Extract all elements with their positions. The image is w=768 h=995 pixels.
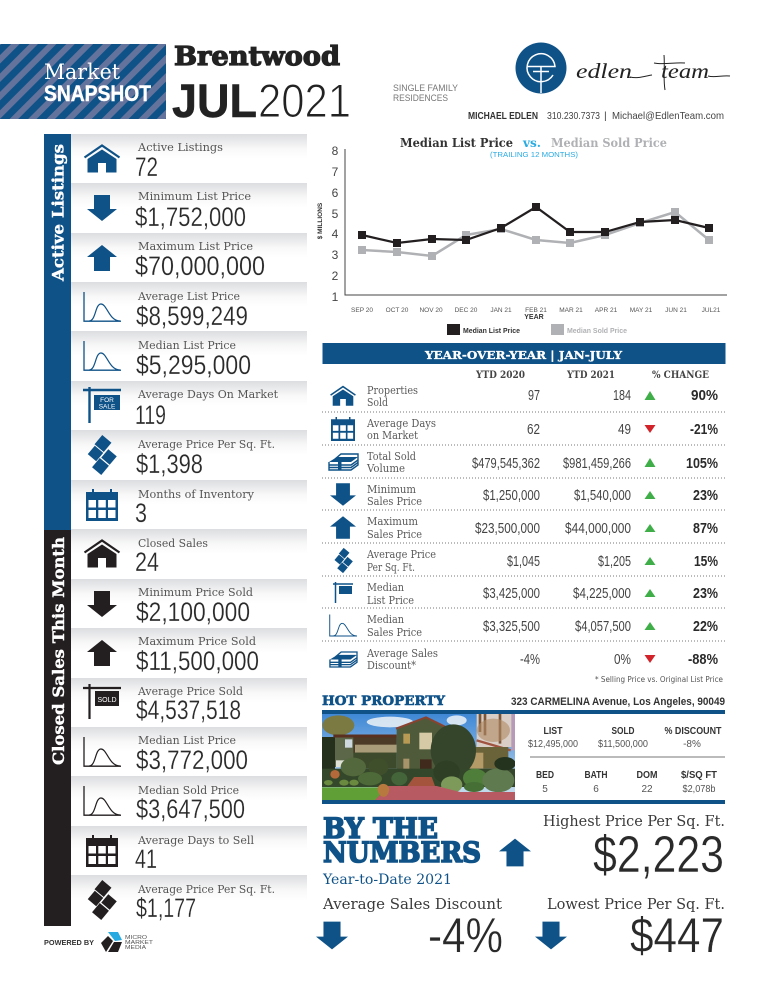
row: average price per sq ft: [71, 875, 307, 926]
logo: edlen team: [516, 42, 730, 94]
chart legend: [447, 324, 627, 335]
line chart: median list vs sold price: JUN 21: [665, 307, 687, 314]
banner: market snapshot: SNAPSHOT: [44, 81, 151, 106]
row: average days on market: 119: [135, 400, 166, 430]
stat: highest price per sq ft: [499, 812, 725, 884]
stat: average sales discount: [316, 895, 503, 963]
row: average price per sq ft: $1,205: [598, 554, 631, 570]
row: closed sales: 24: [135, 547, 159, 577]
chart legend: Median Sold Price: [567, 326, 627, 335]
property stats: % DISCOUNT: [664, 726, 722, 737]
row: average list price: [71, 282, 307, 331]
row: total sold volume: Volume: [366, 462, 405, 475]
line chart: median list vs sold price: MAR 21: [559, 307, 583, 314]
row: average price per sq ft: Per Sq. Ft.: [367, 561, 415, 574]
row: median sold price: Median Sold Price: [138, 784, 239, 797]
line chart: median list vs sold price: JUL21: [702, 307, 721, 314]
row: months of inventory: 3: [135, 498, 147, 528]
table header: year over year: YEAR-OVER-YEAR | JAN-JULY: [424, 348, 623, 362]
row: properties sold: Properties: [367, 384, 418, 397]
line chart: median list vs sold price: [317, 144, 727, 321]
table dividers: [322, 412, 726, 641]
row: median list price: $3,772,000: [136, 745, 248, 775]
line chart: median list vs sold price: DEC 20: [455, 307, 478, 314]
subheading: year to date: Year-to-Date 2021: [322, 872, 452, 888]
photo: house: [322, 714, 516, 800]
banner: market snapshot: Market: [44, 60, 121, 84]
row: average list price: $8,599,249: [136, 301, 248, 331]
powered by credit: MEDIA: [125, 945, 147, 951]
row: average price per sq ft: Average Price: [366, 548, 436, 561]
property stats: LIST: [544, 726, 562, 737]
row: median sales price: 22%: [693, 619, 718, 635]
property stats: BATH: [584, 770, 608, 781]
row: maximum list price: [71, 233, 307, 282]
row: average days on market: [331, 417, 718, 442]
powered by credit: [44, 932, 153, 952]
heading: by the numbers: NUMBERS: [323, 836, 481, 869]
row: properties sold: [331, 384, 718, 409]
row: average price sold: [71, 678, 307, 727]
row: average price per sq ft: 15%: [694, 554, 718, 570]
panel: active listings rows: [71, 134, 307, 529]
row: minimum price sold: Minimum Price Sold: [138, 586, 253, 599]
row: minimum list price: [71, 183, 307, 233]
line chart: median list vs sold price: APR 21: [595, 307, 618, 314]
row: average days on market: Average Days: [366, 417, 436, 430]
row: median list price: List Price: [367, 594, 414, 607]
row: maximum price sold: $11,500,000: [136, 646, 259, 676]
property stats: [528, 726, 725, 795]
line chart: median list vs sold price: 4: [332, 227, 339, 241]
property stats: 22: [641, 784, 653, 795]
sidebar: closed sales: [44, 530, 71, 926]
row: maximum list price: $70,000,000: [135, 251, 265, 281]
row: minimum sales price: $1,250,000: [483, 488, 540, 504]
row: median sales price: Sales Price: [367, 626, 422, 639]
property stats: $2,078b: [682, 784, 716, 795]
row: average sales discount: Discount*: [367, 659, 416, 672]
table column headings: YTD 2021: [566, 370, 615, 381]
row: minimum list price: $1,752,000: [135, 202, 246, 232]
row: average sales discount: -4%: [520, 652, 540, 668]
property stats: DOM: [636, 770, 658, 781]
property stats: $12,495,000: [528, 739, 578, 750]
powered by credit: MARKET: [125, 940, 153, 946]
row: active listings: 72: [135, 152, 158, 182]
row: median sales price: Median: [367, 613, 404, 626]
row: minimum price sold: [71, 579, 307, 628]
row: active listings: [71, 134, 307, 183]
subtitle: property type: RESIDENCES: [393, 93, 448, 104]
row: average price sold: Average Price Sold: [137, 685, 243, 698]
subtitle: property type: SINGLE FAMILY: [393, 83, 459, 94]
stat: highest price per sq ft: $2,223: [593, 826, 724, 884]
sidebar: active listings: Active Listings: [48, 144, 68, 282]
row: median list price: Median List Price: [138, 339, 236, 352]
row: maximum price sold: Maximum Price Sold: [138, 635, 256, 648]
row: properties sold: Sold: [367, 396, 388, 409]
logo: edlen team: edlen: [576, 59, 632, 83]
contact line: MICHAEL EDLEN: [468, 110, 538, 122]
row: maximum list price: Maximum List Price: [138, 240, 253, 253]
row: median list price: [71, 331, 307, 381]
icon: for sale sign: [83, 387, 121, 423]
panel: closed sales rows: [71, 529, 307, 926]
icon: sold sign: SOLD: [97, 697, 117, 704]
row: average sales discount: [330, 647, 718, 672]
row: total sold volume: 105%: [686, 456, 718, 472]
row: months of inventory: Months of Inventory: [138, 488, 255, 501]
property stats: BED: [536, 770, 554, 781]
chart title: Median List Price: [400, 136, 513, 150]
heading: hot property: HOT PROPERTY: [322, 694, 446, 709]
hot property rules: [322, 712, 725, 802]
row: minimum sales price: Minimum: [367, 483, 417, 496]
row: median sales price: [330, 613, 718, 639]
row: median list price: Median: [367, 581, 404, 594]
subtitle: property type: [393, 83, 459, 104]
icon: for sale sign: SALE: [99, 404, 116, 410]
table footnote: * Selling Price vs. Original List Price: [595, 675, 723, 684]
row: average price per sq ft: [71, 430, 307, 480]
stat: lowest price per sq ft: Lowest Price Per Sq. Ft.: [547, 895, 725, 913]
line chart: median list vs sold price: JAN 21: [490, 307, 512, 314]
row: average days to sell: [71, 826, 307, 875]
row: median list price: 23%: [693, 586, 718, 602]
row: average list price: Average List Price: [137, 290, 240, 303]
property address: 323 CARMELINA Avenue, Los Angeles, 90049: [511, 696, 725, 708]
row: median sold price: $3,647,500: [136, 794, 245, 824]
row: properties sold: 90%: [691, 388, 718, 404]
stat: average sales discount: Average Sales Discount: [322, 895, 502, 913]
powered by credit: MICRO: [125, 935, 147, 941]
row: minimum sales price: $1,540,000: [574, 488, 631, 504]
stat: lowest price per sq ft: [535, 895, 725, 963]
row: average price per sq ft: $1,398: [136, 449, 203, 479]
row: median list price: Median List Price: [138, 734, 236, 747]
heading: by the numbers: BY THE: [323, 812, 438, 845]
line chart: median list vs sold price: 2: [332, 269, 339, 283]
row: average days to sell: Average Days to Sell: [137, 834, 254, 847]
line chart: median list vs sold price: 6: [332, 186, 339, 200]
line chart: median list vs sold price: FEB 21: [525, 307, 547, 314]
sidebar: active listings: [44, 134, 71, 530]
row: total sold volume: Total Sold: [367, 450, 416, 463]
line chart: median list vs sold price: 1: [332, 290, 339, 304]
row: maximum sales price: Maximum: [367, 515, 419, 528]
line chart: median list vs sold price: SEP 20: [351, 307, 373, 314]
row: properties sold: 97: [528, 388, 540, 404]
property stats: $11,500,000: [598, 739, 648, 750]
row: average sales discount: -88%: [688, 652, 718, 668]
row: closed sales: [71, 529, 307, 579]
row: maximum sales price: $44,000,000: [565, 521, 631, 537]
row: average sales discount: Average Sales: [366, 647, 438, 660]
line chart: median list vs sold price: 8: [332, 144, 339, 158]
logo: edlen team: team: [661, 59, 709, 83]
property stats: $/SQ FT: [681, 770, 717, 781]
row: median sales price: $3,325,500: [483, 619, 540, 635]
stat: average sales discount: -4%: [428, 909, 503, 963]
row: minimum sales price: [330, 483, 718, 508]
row: months of inventory: [71, 480, 307, 529]
row: average days to sell: 41: [135, 844, 157, 874]
row: average price per sq ft: [334, 548, 718, 574]
row: average days on market: 62: [527, 422, 540, 438]
row: total sold volume: [329, 450, 718, 475]
stat: lowest price per sq ft: $447: [630, 909, 724, 963]
contact line: 310.230.7373: [547, 110, 600, 122]
line chart: median list vs sold price: 3: [332, 248, 339, 262]
row: median sales price: $4,057,500: [575, 619, 631, 635]
row: average price sold: $4,537,518: [136, 695, 241, 725]
table header: year over year: [322, 343, 726, 364]
row: maximum sales price: Sales Price: [367, 528, 422, 541]
line chart: median list vs sold price: 7: [332, 165, 339, 179]
contact line: [468, 110, 724, 122]
row: minimum list price: Minimum List Price: [138, 190, 251, 203]
row: active listings: Active Listings: [137, 141, 223, 154]
line chart: median list vs sold price: OCT 20: [386, 307, 409, 314]
line chart: median list vs sold price: MAY 21: [630, 307, 653, 314]
row: maximum sales price: [330, 515, 718, 541]
row: minimum sales price: 23%: [693, 488, 718, 504]
row: average days on market: on Market: [367, 429, 419, 442]
line chart: median list vs sold price: NOV 20: [419, 307, 443, 314]
table column headings: [475, 370, 709, 381]
property stats: SOLD: [612, 726, 634, 737]
line chart: median list vs sold price: YEAR: [524, 314, 544, 321]
chart title: [400, 136, 667, 159]
chart legend: Median List Price: [463, 326, 520, 335]
row: median list price: $3,425,000: [483, 586, 540, 602]
row: maximum price sold: [71, 628, 307, 678]
line chart: median list vs sold price: 5: [332, 207, 339, 221]
powered by credit: POWERED BY: [44, 938, 94, 947]
row: median list price: $4,225,000: [573, 586, 631, 602]
row: average days on market: Average Days On Market: [137, 388, 279, 401]
stat: highest price per sq ft: Highest Price Per Sq. Ft.: [543, 812, 725, 830]
row: average days on market: 49: [618, 422, 631, 438]
property stats: 6: [593, 784, 599, 795]
row: maximum sales price: $23,500,000: [475, 521, 540, 537]
row: median list price: [333, 581, 718, 607]
row: minimum sales price: Sales Price: [367, 495, 422, 508]
row: median list price: [71, 727, 307, 776]
title: month and year: 2021: [258, 74, 351, 127]
contact line: |: [604, 110, 607, 122]
banner: market snapshot: [0, 44, 166, 119]
chart title: Median Sold Price: [551, 136, 667, 150]
chart title: (TRAILING 12 MONTHS): [490, 150, 579, 159]
row: total sold volume: $981,459,266: [563, 456, 631, 472]
row: average price per sq ft: Average Price Per Sq. Ft.: [137, 438, 275, 451]
row: average days on market: [71, 381, 307, 430]
row: average price per sq ft: $1,045: [507, 554, 540, 570]
title: area name: Brentwood: [174, 42, 340, 72]
table column headings: YTD 2020: [475, 370, 525, 381]
title: month and year: [172, 74, 351, 127]
row: average sales discount: 0%: [614, 652, 631, 668]
row: closed sales: Closed Sales: [138, 537, 208, 550]
property stats: 5: [542, 784, 548, 795]
row: maximum sales price: 87%: [693, 521, 718, 537]
row: average price per sq ft: $1,177: [136, 893, 196, 923]
table column headings: % CHANGE: [652, 370, 709, 381]
row: total sold volume: $479,545,362: [472, 456, 540, 472]
row: median sold price: [71, 776, 307, 826]
row: average days on market: -21%: [690, 422, 718, 438]
title: month and year: JUL: [172, 74, 257, 127]
line chart: median list vs sold price: $ MILLIONS: [317, 202, 324, 239]
chart title: vs.: [522, 136, 541, 150]
contact line: Michael@EdlenTeam.com: [612, 110, 724, 122]
row: median list price: $5,295,000: [136, 350, 251, 380]
row: properties sold: 184: [613, 388, 631, 404]
icon: sign: [333, 582, 353, 603]
property stats: -8%: [683, 739, 701, 750]
sidebar: closed sales: Closed Sales This Month: [49, 537, 68, 765]
icon: for sale sign: FOR: [100, 397, 114, 404]
icon: sold sign: [83, 684, 121, 719]
heading: by the numbers: [323, 812, 481, 869]
row: minimum price sold: $2,100,000: [136, 597, 250, 627]
row: average price per sq ft: Average Price Per Sq. Ft.: [137, 883, 275, 896]
table: year over year rows: [329, 384, 718, 672]
